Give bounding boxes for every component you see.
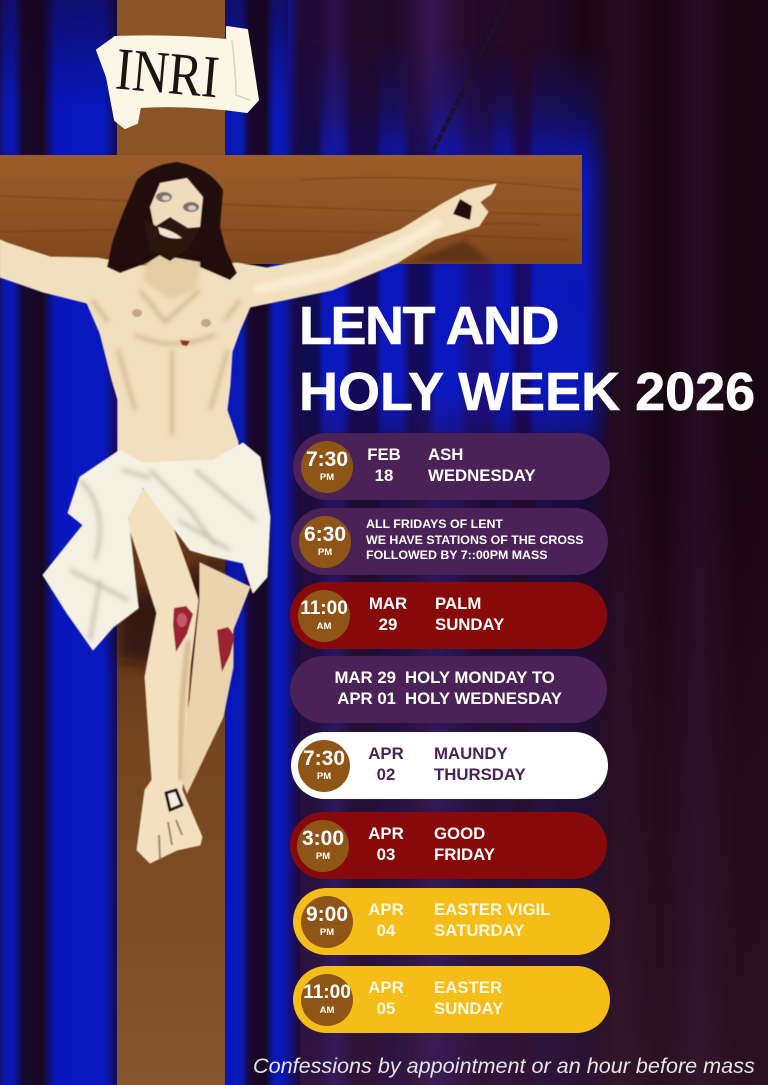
- date: [368, 900, 404, 940]
- panel: Easter Vigil: [293, 888, 610, 955]
- event name: EASTER: [434, 978, 502, 997]
- date: [369, 594, 407, 634]
- knee wounds: [173, 606, 193, 652]
- neck: [143, 250, 205, 300]
- panel: Easter Sunday: [293, 966, 610, 1033]
- event name: MAUNDY: [434, 744, 508, 763]
- event name: GOOD: [434, 824, 485, 843]
- time badge: [301, 974, 353, 1026]
- event name: HOLY WEDNESDAY: [405, 689, 562, 708]
- time badge: 9:00: [306, 902, 348, 926]
- date: [368, 978, 404, 1018]
- panel: Ash Wednesday: [293, 433, 610, 500]
- time badge: PM: [320, 926, 334, 938]
- stations note: [366, 517, 584, 562]
- chain: [432, 0, 508, 153]
- event name: ASH: [428, 445, 463, 464]
- event name: [434, 824, 495, 864]
- event name: HOLY MONDAY TO: [405, 668, 555, 687]
- date: 29: [379, 615, 397, 634]
- date: MAR: [369, 594, 407, 613]
- hand wound: [453, 199, 472, 220]
- eyes: [156, 192, 172, 202]
- event name: EASTER VIGIL: [434, 900, 551, 919]
- time badge: 3:00: [302, 826, 344, 850]
- time badge: 7:30: [303, 746, 345, 770]
- event name: PALM: [435, 594, 481, 613]
- date: 02: [377, 765, 395, 784]
- date: [367, 445, 401, 485]
- date: APR: [368, 744, 404, 763]
- figure of Jesus: [0, 162, 496, 863]
- time badge: AM: [317, 620, 331, 632]
- date: 04: [377, 921, 395, 940]
- time badge: PM: [317, 770, 331, 782]
- time badge: PM: [320, 472, 334, 482]
- arms and torso: [0, 184, 496, 475]
- date: 05: [377, 999, 395, 1018]
- time badge: 11:00: [300, 598, 348, 618]
- blue lit curtain folds: [288, 0, 612, 1085]
- date: 18: [375, 466, 393, 485]
- stations note: WE HAVE STATIONS OF THE CROSS: [366, 533, 584, 547]
- event name: THURSDAY: [434, 765, 526, 784]
- time badge: PM: [318, 546, 332, 558]
- date range: MAR 29: [334, 668, 396, 687]
- panel: Palm Sunday: [290, 582, 607, 649]
- time badge: [298, 590, 350, 642]
- panel: Fridays of Lent: [291, 508, 608, 575]
- time badge: 6:30: [304, 522, 346, 546]
- date range: APR 01: [337, 689, 396, 708]
- panel: Maundy Thursday: [291, 732, 608, 799]
- front leg: [128, 487, 202, 863]
- time badge: 7:30: [306, 448, 348, 470]
- event name: [428, 445, 536, 485]
- time badge: 11:00: [303, 982, 351, 1002]
- torso shading: [92, 290, 240, 435]
- event name: [405, 668, 562, 708]
- mouth: [158, 227, 182, 238]
- time badge: [301, 440, 353, 492]
- event name: [435, 594, 504, 634]
- title: [299, 296, 755, 550]
- title scroll: INRI: INRI: [113, 36, 222, 110]
- face: [150, 178, 203, 240]
- time badge: AM: [320, 1004, 334, 1016]
- date: 03: [377, 845, 395, 864]
- stations note: ALL FRIDAYS OF LENT: [366, 517, 503, 531]
- time badge: [299, 516, 351, 568]
- foot nail: [166, 790, 182, 810]
- back leg: [177, 563, 250, 793]
- beard: [143, 217, 200, 261]
- shadow on cross: [117, 560, 225, 680]
- date: APR: [368, 978, 404, 997]
- event name: SUNDAY: [434, 999, 503, 1018]
- hair: [107, 162, 237, 280]
- time badge: [297, 820, 349, 872]
- cross beam: [0, 155, 582, 264]
- date: [368, 824, 404, 864]
- time badge: [298, 740, 350, 792]
- title: LENT AND: [299, 296, 558, 356]
- date: FEB: [367, 445, 401, 464]
- arm highlight: [255, 222, 440, 290]
- stations note: FOLLOWED BY 7::00PM MASS: [366, 548, 548, 562]
- event name: [434, 744, 526, 784]
- panel: Holy Monday to Wednesday: [290, 656, 607, 723]
- time badge: [301, 896, 353, 948]
- date: [368, 744, 404, 784]
- date range: [334, 668, 396, 708]
- panel: Good Friday: [290, 812, 607, 879]
- event name: SATURDAY: [434, 921, 524, 940]
- event name: WEDNESDAY: [428, 466, 536, 485]
- title: HOLY WEEK 2026: [299, 362, 755, 422]
- event name: [434, 978, 503, 1018]
- date: APR: [368, 900, 404, 919]
- time badge: PM: [316, 850, 330, 862]
- loincloth: [43, 443, 270, 650]
- event name: FRIDAY: [434, 845, 495, 864]
- footer note: Confessions by appointment or an hour before mass: [253, 1053, 755, 1078]
- title scroll: INRI: [97, 27, 258, 128]
- event name: [434, 900, 551, 940]
- event name: SUNDAY: [435, 615, 504, 634]
- cross upright: [117, 0, 225, 1085]
- date: APR: [368, 824, 404, 843]
